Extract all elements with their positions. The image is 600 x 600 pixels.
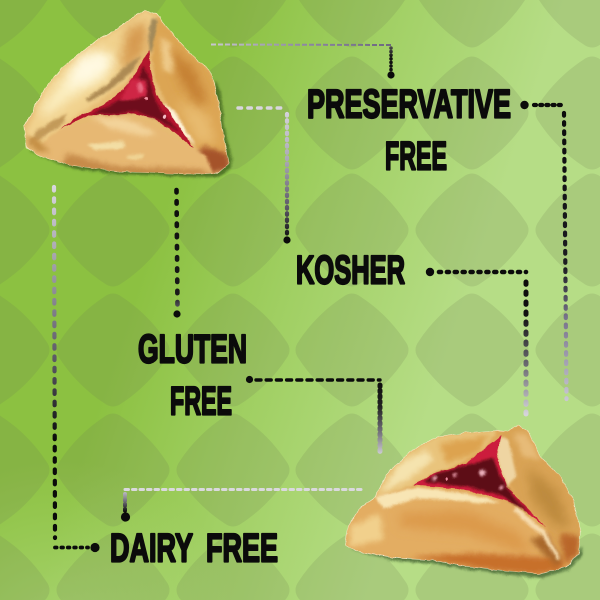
upper left flap (375, 431, 497, 497)
connector: dairy free top (121, 490, 361, 522)
pastry: bottom right hamantasch (345, 425, 582, 578)
label: gluten free: FREE (170, 380, 232, 424)
left flap (25, 11, 155, 147)
connector: kosher right (426, 268, 526, 414)
connector: preservative free top (211, 44, 395, 79)
connector: gluten free right (246, 376, 380, 455)
label: preservative free: FREE (385, 134, 447, 178)
highlight next to filling (163, 103, 195, 145)
bottom flap (346, 498, 546, 574)
label: dairy free: DAIRY FREE (110, 526, 278, 570)
bottom flap (32, 150, 214, 174)
jam filling (60, 49, 193, 148)
connector: gluten free up (173, 190, 181, 318)
connector: dairy free left (54, 187, 100, 552)
label: preservative free (307, 82, 511, 178)
pastry: top left hamantasch (24, 11, 232, 177)
jam filling (413, 435, 546, 527)
label: kosher: KOSHER (296, 248, 405, 292)
right flap (500, 425, 581, 557)
label: gluten free (138, 328, 247, 424)
label: gluten free: GLUTEN (138, 328, 247, 372)
connector: preservative free right (520, 101, 566, 399)
right flap (152, 17, 229, 163)
connector: kosher left (238, 108, 291, 244)
